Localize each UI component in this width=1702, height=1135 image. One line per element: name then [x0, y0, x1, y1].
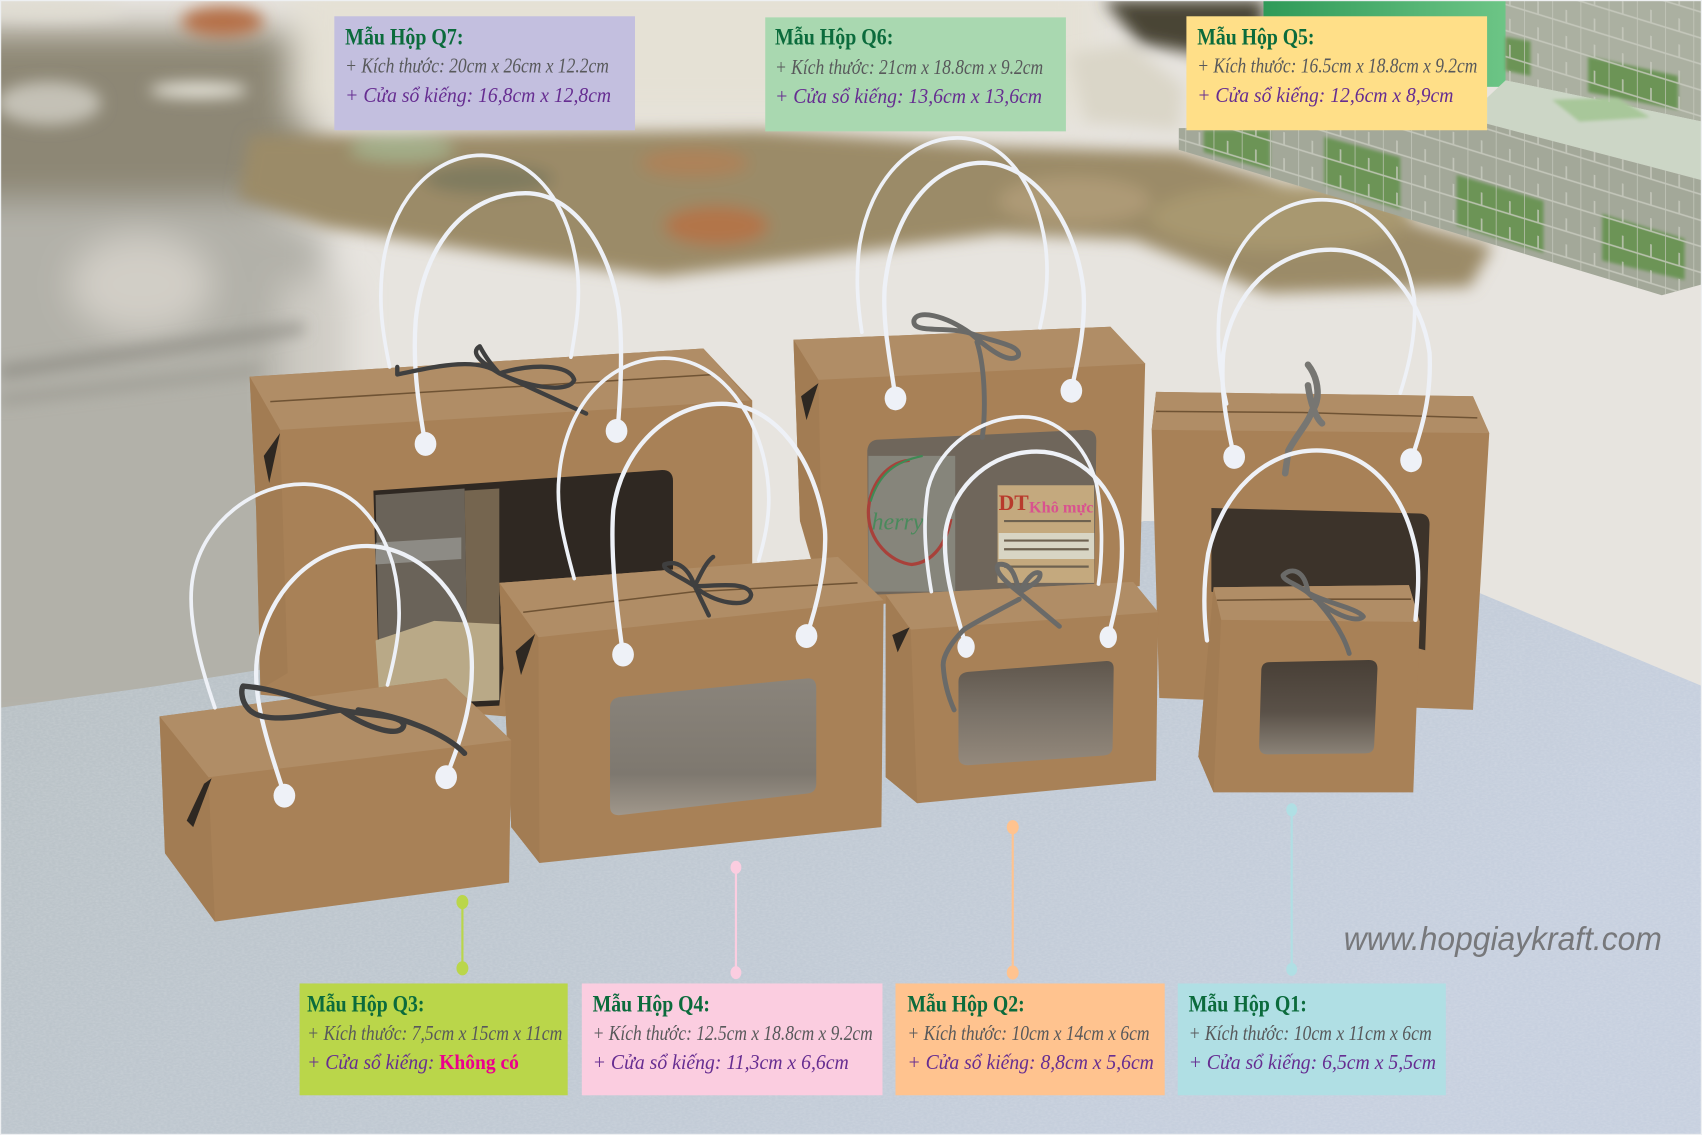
- label: Q3: + Kích thước: 7,5cm x 15cm x 11cm: [307, 1021, 562, 1045]
- box Q3: [160, 484, 511, 922]
- window Q6 with jar: Khô mực: [1029, 497, 1093, 516]
- ribbon Q7: [397, 346, 586, 414]
- ribbon Q6: [914, 315, 1019, 437]
- label: Q5: + Cửa sổ kiếng: 12,6cm x 8,9cm: [1197, 83, 1453, 107]
- connector Q1: [1287, 804, 1297, 975]
- label: Q2: + Cửa sổ kiếng: 8,8cm x 5,6cm: [907, 1050, 1154, 1074]
- green bin: [1263, 0, 1507, 87]
- box Q1: [1198, 450, 1420, 792]
- connector Q2: [1007, 821, 1018, 979]
- label: Q7: + Cửa sổ kiếng: 16,8cm x 12,8cm: [345, 83, 611, 107]
- ribbon Q5: [1285, 365, 1322, 473]
- handles Q3: [191, 484, 472, 808]
- label: Q5: Mẫu Hộp Q5:: [1197, 25, 1314, 50]
- ribbon Q4: [664, 557, 751, 615]
- label: Q2: + Kích thước: 10cm x 14cm x 6cm: [907, 1021, 1150, 1045]
- handles Q5: [1218, 200, 1430, 472]
- window Q6 with jar: herry: [872, 510, 924, 536]
- connector Q4: [731, 861, 741, 979]
- connector Q3: [457, 896, 468, 975]
- label: Q1: Mẫu Hộp Q1:: [1189, 992, 1307, 1017]
- handles Q2: [925, 417, 1122, 658]
- label: Q6: + Kích thước: 21cm x 18.8cm x 9.2cm: [775, 55, 1043, 79]
- label: Q1: [1178, 983, 1446, 1095]
- label: Q1: + Cửa sổ kiếng: 6,5cm x 5,5cm: [1189, 1050, 1436, 1074]
- handles Q4: [558, 358, 825, 666]
- box Q4: [499, 358, 884, 863]
- handles Q7: [381, 155, 627, 456]
- label: Q4: + Cửa sổ kiếng: 11,3cm x 6,6cm: [593, 1050, 849, 1074]
- window Q7 with jar and rice: [373, 470, 673, 711]
- label: Q4: + Kích thước: 12.5cm x 18.8cm x 9.2cm: [593, 1021, 873, 1045]
- cloth table surface: [0, 521, 1702, 1135]
- label: Q7: + Kích thước: 20cm x 26cm x 12.2cm: [345, 54, 609, 78]
- tiled steps: [1179, 0, 1702, 295]
- label: Q5: [1186, 16, 1487, 130]
- box Q5: [1152, 200, 1489, 710]
- ribbon Q2: [943, 564, 1059, 710]
- ribbon Q3: [242, 686, 465, 753]
- label: Q7: Mẫu Hộp Q7:: [345, 25, 463, 50]
- box Q7: [250, 155, 752, 716]
- label: Q3: Mẫu Hộp Q3:: [307, 992, 424, 1017]
- window Q6 with jar: [867, 430, 1096, 595]
- label: Q6: + Cửa sổ kiếng: 13,6cm x 13,6cm: [775, 84, 1042, 108]
- website watermark: www.hopgiaykraft.com: [1344, 921, 1662, 958]
- label: Q3: + Cửa sổ kiếng: Không có: [307, 1050, 519, 1074]
- label: Q4: Mẫu Hộp Q4:: [593, 992, 710, 1017]
- box Q6: [793, 138, 1145, 608]
- label: Q2: Mẫu Hộp Q2:: [907, 992, 1025, 1017]
- label: Q4: [582, 983, 882, 1095]
- handle Q1: [1204, 450, 1418, 640]
- window Q6 with jar: DT: [999, 491, 1029, 515]
- label: Q3: [300, 983, 568, 1095]
- label: Q5: + Kích thước: 16.5cm x 18.8cm x 9.2cm: [1197, 54, 1477, 78]
- ribbon Q1: [1283, 571, 1363, 653]
- label: Q7: [334, 16, 635, 130]
- label: Q6: [765, 17, 1066, 131]
- label: Q6: Mẫu Hộp Q6:: [775, 25, 893, 50]
- box Q2: [886, 417, 1158, 803]
- handles Q6: [857, 138, 1084, 410]
- label: Q2: [896, 983, 1165, 1095]
- label: Q1: + Kích thước: 10cm x 11cm x 6cm: [1189, 1021, 1432, 1045]
